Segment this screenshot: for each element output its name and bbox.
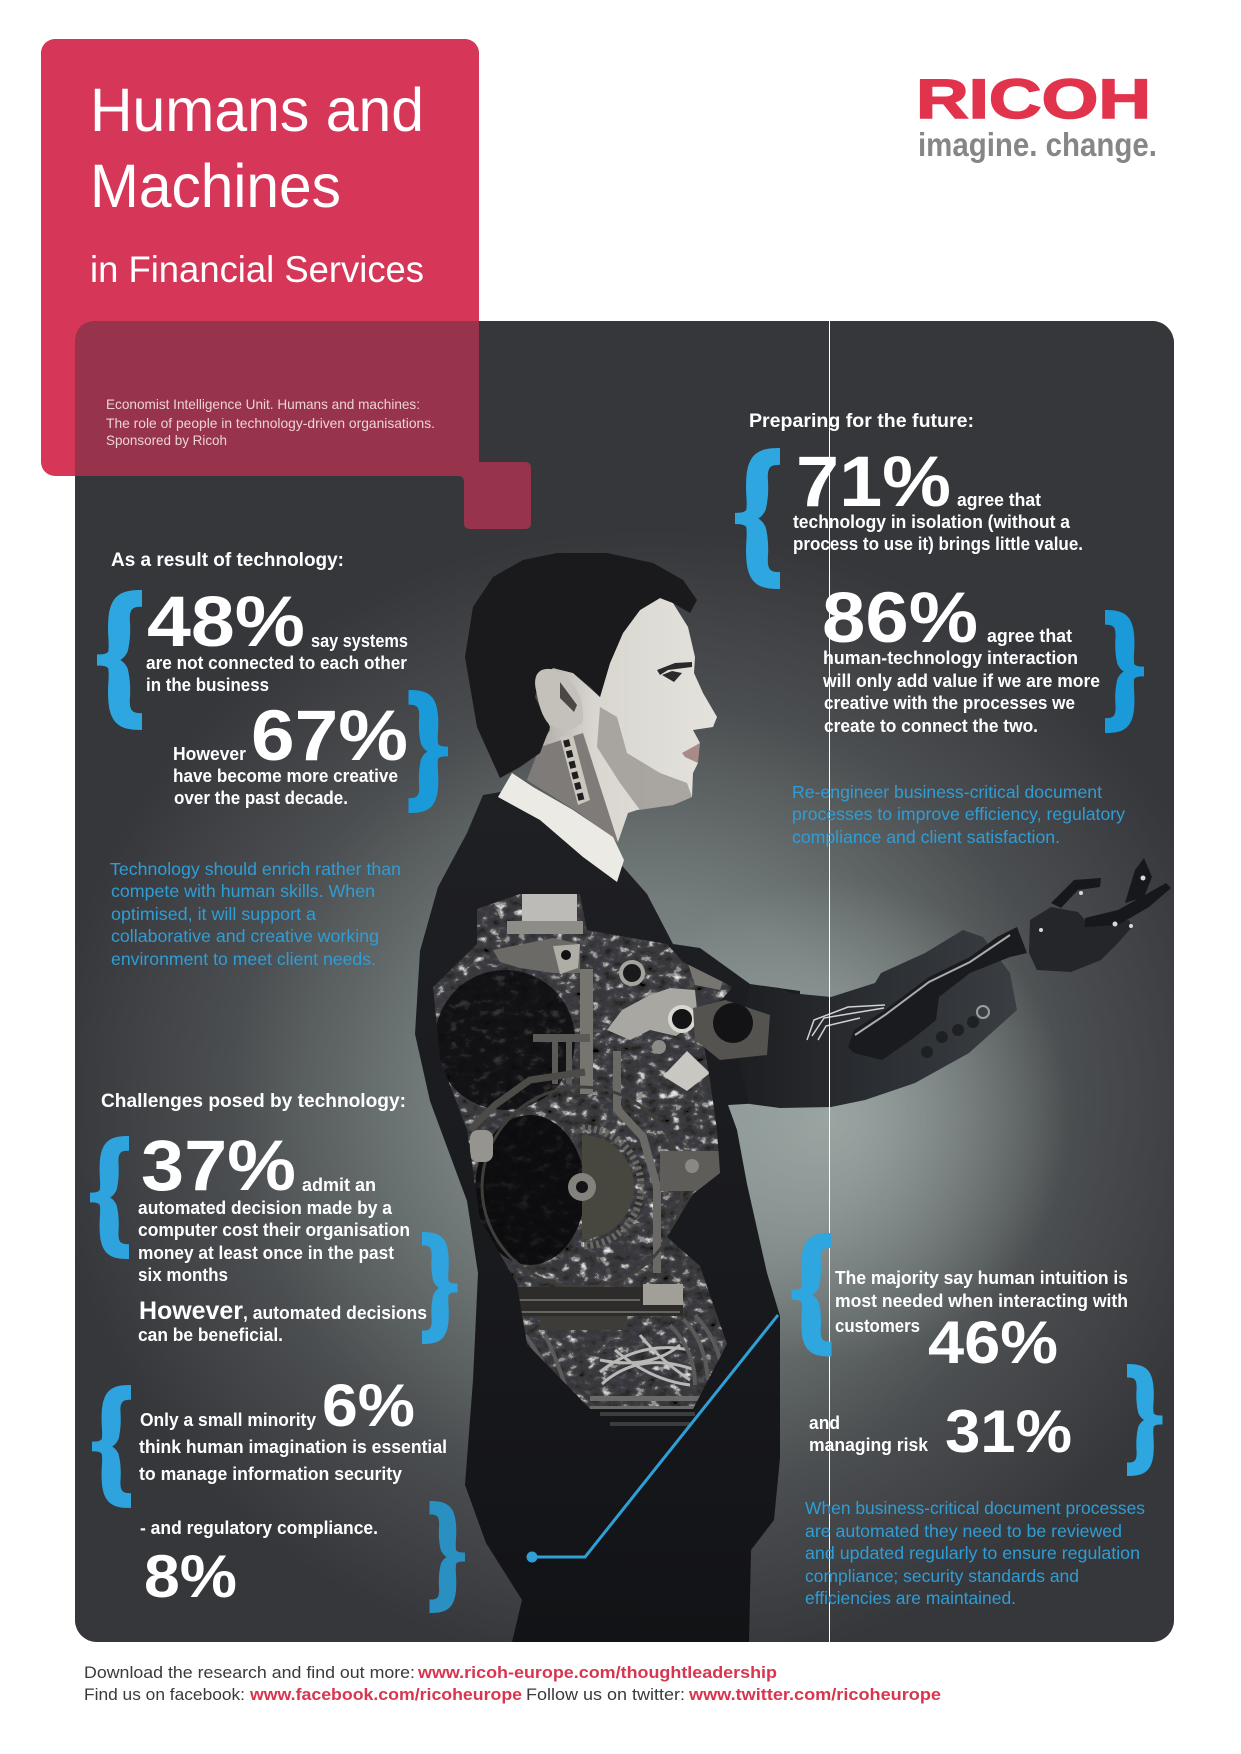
stat 67% text [173,744,398,808]
suit sleeve [735,930,1017,1108]
dark wires [525,1315,722,1385]
illustration: man with machine body [415,553,1171,1642]
red title box [41,39,479,476]
bottom manifold [517,1284,683,1316]
stripes [590,1396,700,1409]
palm [1029,907,1132,972]
arm wires [807,1005,885,1040]
however text: However [139,1297,243,1325]
blue paragraph: optimised, it will support a [111,904,316,924]
intuition text: The majority say human intuition is [835,1268,1128,1288]
left brace [90,1136,129,1259]
right brace [408,690,448,813]
blue paragraph: compete with human skills. When [111,881,375,901]
dark photo panel [75,321,1174,1642]
right brace [1105,610,1144,733]
manifold [493,938,580,973]
stat 86% text: create to connect the two. [824,716,1038,736]
source note: The role of people in technology-driven organisations. [106,415,435,431]
stat 48%: 48% [147,583,305,662]
stat 48% text: in the business [146,675,269,695]
stat 86% text: agree that [987,626,1072,646]
source note: Economist Intelligence Unit. Humans and machines: [106,396,420,412]
risk text: and [809,1413,840,1433]
risk text: managing risk [809,1435,929,1455]
heading: As a result of technology: [111,550,344,571]
stat 86% text: human-technology interaction [823,648,1078,668]
dark gear cavity [475,1115,585,1265]
stat 86%: 86% [822,579,978,658]
blue paragraph: When business-critical document processes [805,1498,1145,1518]
stat 71% text: process to use it) brings little value. [793,534,1083,554]
stat 6% text: - and regulatory compliance. [140,1518,378,1538]
stat 67% text: have become more creative [173,766,398,786]
footer links: www.ricoh-europe.com/thoughtleadership [417,1663,777,1682]
footer links: www.facebook.com/ricoheurope [249,1685,522,1704]
shirt collar [498,773,624,882]
blue pointer line [526,1315,778,1562]
left brace [792,1233,832,1356]
flange with hole [553,944,580,974]
stat 31%: 31% [945,1398,1072,1465]
title text [90,76,424,290]
blue paragraph: efficiencies are maintained. [805,1588,1016,1608]
big arc [482,1087,682,1287]
neck shadow [527,733,618,842]
small disc [652,1040,666,1054]
blue paragraph [110,859,401,969]
cuff buttons [921,1006,989,1058]
bright right upper machinery [607,988,698,1040]
footer links [84,1663,941,1704]
stat 37% text: automated decision made by a [138,1198,393,1218]
stat 37% text: admit an [302,1175,376,1195]
engine cover block [522,894,577,922]
intuition text: customers [835,1316,920,1336]
stat 6% text: think human imagination is essential [139,1437,447,1457]
stat 6%: 6% [322,1372,415,1439]
stat 6% text: Only a small minority [140,1410,316,1430]
brow and eye [657,662,692,682]
stat 67% text: However [173,744,246,764]
stat 8%: 8% [144,1543,237,1610]
hair [465,553,697,778]
section: preparing for the future [735,411,1144,847]
S-rail [617,1051,657,1273]
risk text [809,1413,929,1455]
left brace [92,1385,131,1508]
stat 71% text: technology in isolation (without a [793,512,1071,532]
footer links: Find us on facebook: [84,1685,245,1704]
right brace [1127,1364,1162,1476]
right brace [422,1232,458,1344]
bright shard [663,1051,710,1091]
stat 67% text: over the past decade. [174,788,348,808]
gear half disc [568,1128,641,1246]
Ricoh logo: RICOH [916,67,1151,130]
heading: Preparing for the future: [749,411,974,432]
ear inner [560,682,577,712]
face and neck [527,598,717,842]
source note [106,396,435,448]
blue paragraph [805,1498,1145,1608]
footer links: Download the research and find out more: [84,1663,415,1682]
robotic forearm [848,927,1027,1060]
blue paragraph: Technology should enrich rather than [110,859,401,879]
stat 37% text: computer cost their organisation [138,1220,410,1240]
stat 86% text: will only add value if we are more [822,671,1100,691]
stat 71% text: agree that [957,490,1041,510]
lips [682,743,700,763]
pillars [533,1034,590,1084]
right engine block [660,1151,720,1191]
stat 37% text [138,1175,410,1285]
jaw stubble [597,707,692,810]
cover plate [507,921,583,934]
title text: in Financial Services [90,249,424,290]
ring [670,1007,694,1031]
however text: can be beneficial. [138,1325,283,1345]
blue paragraph: compliance; security standards and [805,1566,1079,1586]
stat 37% text: six months [138,1265,228,1285]
translucent red overlap and tab [75,321,531,529]
stat 6% text [139,1410,447,1538]
section: as a result of technology [97,550,448,969]
however text [138,1297,427,1345]
stat 46%: 46% [928,1309,1058,1376]
stat 6% text: to manage information security [139,1464,402,1484]
ear [535,669,583,730]
stat 86% text: creative with the processes we [824,693,1075,713]
heading: Challenges posed by technology: [101,1091,406,1112]
Ricoh logo: imagine. change. [918,126,1157,163]
source note: Sponsored by Ricoh [106,432,227,448]
stat 71% text [793,490,1083,554]
top right plate [688,964,723,990]
left brace [735,448,780,589]
Ricoh logo [916,67,1157,163]
blue paragraph: processes to improve efficiency, regulatory [792,804,1125,824]
central column [580,969,593,1094]
blue paragraph [792,782,1125,847]
section: challenges posed by technology [90,1091,465,1613]
stat 71%: 71% [796,443,951,522]
footer links: www.twitter.com/ricoheurope [688,1685,941,1704]
stat 48% text [146,631,408,695]
base band [540,1316,627,1330]
title text: Humans and [90,76,424,144]
stat 37% text: money at least once in the past [138,1243,394,1263]
upper right valve [621,962,643,984]
section: human intuition [792,1233,1162,1608]
stripes below torso [600,1412,695,1426]
left pulley [470,1130,493,1162]
right brace [430,1501,465,1613]
blue paragraph: are automated they need to be reviewed [805,1521,1122,1541]
blue paragraph: compliance and client satisfaction. [792,827,1060,847]
diagonal arm [470,1072,585,1130]
stat 37%: 37% [141,1127,296,1206]
blue paragraph: Re-engineer business-critical document [792,782,1102,802]
left brace [97,590,142,730]
stat 48% text: say systems [311,631,408,651]
blue paragraph: collaborative and creative working [111,926,379,946]
footer links: Follow us on twitter: [526,1685,685,1704]
forearm highlight [855,935,1010,1035]
fingers [1051,858,1171,927]
title text: Machines [90,152,341,220]
dark left cavity [435,970,575,1110]
robotic torso [433,894,732,1409]
bright wires [600,1335,695,1385]
white vertical line [829,321,830,1642]
neck chip [560,735,590,805]
blue paragraph: and updated regularly to ensure regulation [805,1543,1140,1563]
stat 48% text: are not connected to each other [146,653,407,673]
intuition text: most needed when interacting with [835,1291,1128,1311]
stat 67%: 67% [251,697,408,776]
blue paragraph: environment to meet client needs. [111,949,376,969]
suit body [415,790,800,1642]
intuition text [835,1268,1128,1336]
stat 86% text [822,626,1100,736]
hand highlights [1039,876,1146,932]
however text: , automated decisions [243,1303,427,1323]
shoulder plate with disc [693,1000,770,1060]
